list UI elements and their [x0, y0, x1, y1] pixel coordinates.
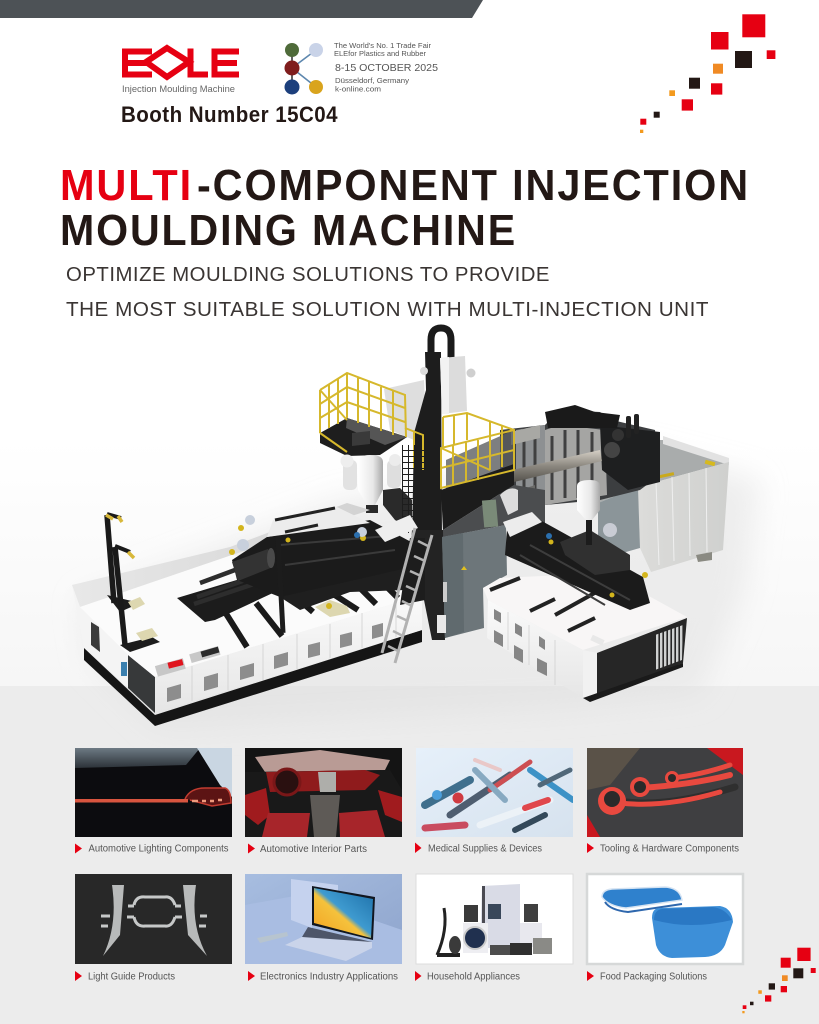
captions: Automotive Interior Parts	[260, 844, 367, 855]
right access platform with railing	[441, 413, 545, 537]
captions: Household Appliances	[427, 972, 520, 982]
upper grey wall and tower	[384, 328, 476, 540]
title: MOULDING MACHINE	[60, 206, 517, 255]
logo: BOLE	[122, 48, 239, 95]
right lower machine	[483, 480, 687, 702]
booth number: Booth Number 15C04	[121, 102, 338, 127]
grey electrical cabinet	[437, 525, 507, 638]
background floor band	[0, 440, 819, 1024]
captions: Electronics Industry Applications	[260, 972, 398, 982]
tower base block	[410, 530, 445, 640]
product: household appliances	[416, 874, 573, 964]
captions: Food Packaging Solutions	[600, 972, 707, 982]
floor shadow	[80, 450, 760, 728]
logo: K fair molecule	[284, 43, 323, 94]
fair details text: 8-15 OCTOBER 2025	[335, 62, 438, 74]
fair details text: k-online.com	[335, 84, 381, 94]
captions	[75, 842, 739, 982]
product: electronics	[245, 874, 402, 964]
fair details text: The World's No. 1 Trade Fair	[334, 41, 432, 50]
captions: Automotive Lighting Components	[88, 844, 228, 854]
captions: Tooling & Hardware Components	[600, 844, 739, 854]
captions: Light Guide Products	[88, 972, 175, 982]
fair details text: Düsseldorf, Germany	[335, 76, 409, 85]
logo: BOLE: Injection Moulding Machine	[122, 84, 235, 95]
decorative squares: top right	[640, 14, 775, 133]
subtitle	[66, 264, 709, 321]
decorative squares: bottom right	[742, 948, 816, 1013]
top header bar	[0, 0, 483, 18]
main left platform	[72, 503, 422, 726]
back right enclosure	[598, 436, 729, 572]
title: -COMPONENT INJECTION	[197, 161, 750, 210]
left access platform with railing	[320, 373, 423, 470]
product: light guide	[75, 874, 232, 964]
subtitle: OPTIMIZE MOULDING SOLUTIONS TO PROVIDE	[66, 264, 550, 286]
product: automotive interior	[245, 748, 402, 837]
title	[60, 161, 750, 255]
hoppers	[340, 454, 412, 530]
title: MULTI	[60, 161, 193, 210]
product: medical supplies	[416, 748, 573, 837]
product: food packaging	[587, 874, 743, 964]
product: automotive lighting	[75, 748, 232, 837]
central cage ladder	[402, 445, 440, 533]
machine illustration	[72, 328, 760, 728]
fair details text	[334, 41, 438, 94]
captions: Medical Supplies & Devices	[428, 844, 542, 854]
side ladder	[382, 528, 432, 663]
product: tooling and hardware	[587, 748, 743, 837]
injection unit on left platform	[106, 507, 425, 647]
subtitle: THE MOST SUITABLE SOLUTION WITH MULTI-INJECTION UNIT	[66, 299, 709, 321]
rear clamping unit	[500, 405, 660, 520]
fair details text: ELEfor Plastics and Rubber	[334, 49, 427, 58]
